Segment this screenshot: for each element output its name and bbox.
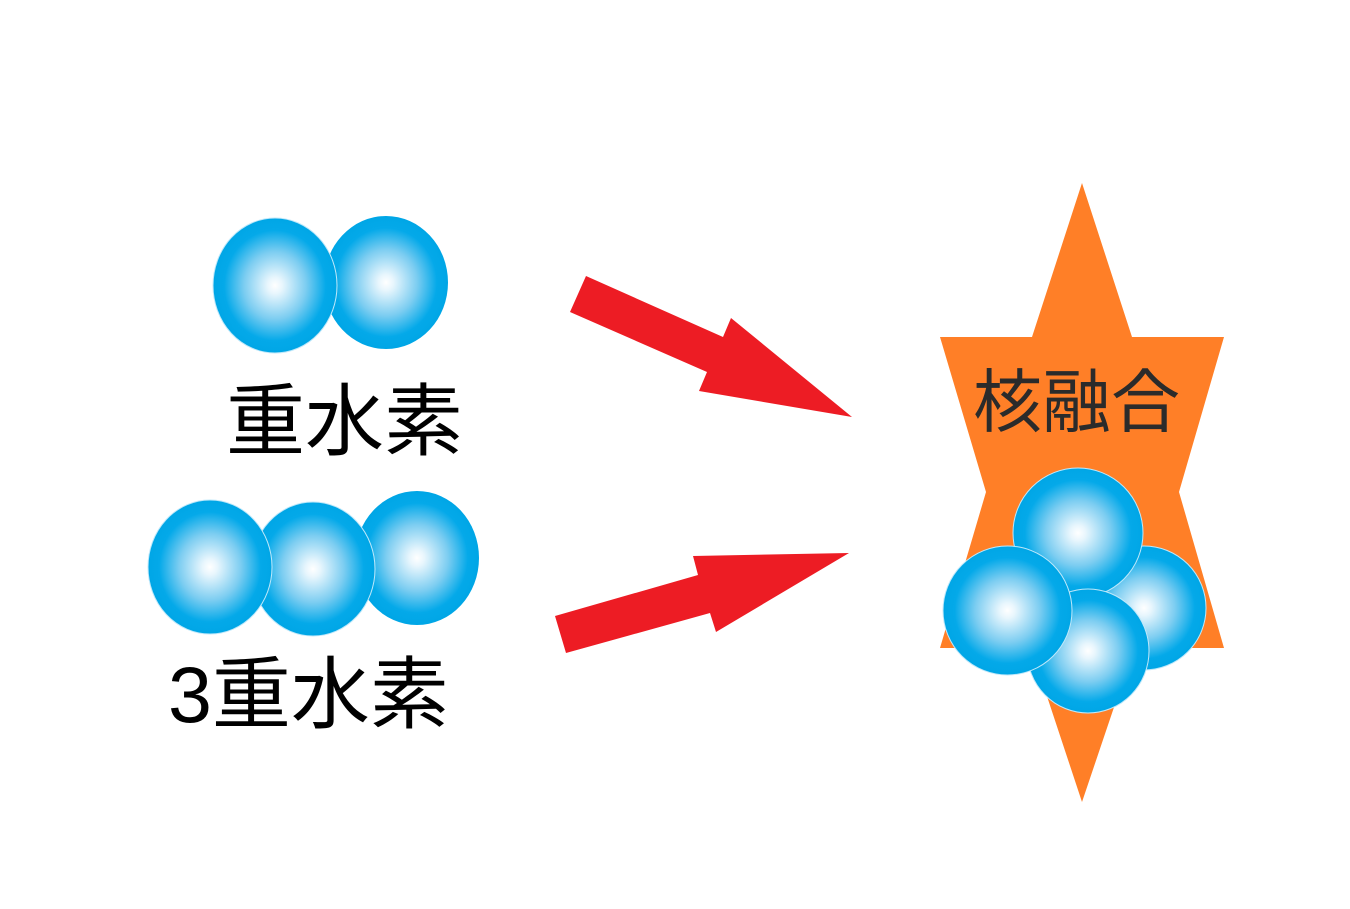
deuterium atom group [213, 216, 448, 353]
arrow: upper [570, 276, 852, 417]
label: tritium: 3重水素 [168, 650, 449, 739]
fusion star burst [940, 183, 1224, 802]
arrow: lower [555, 553, 849, 653]
label: fusion: 核融合 [973, 364, 1180, 441]
tritium atom group [148, 491, 479, 636]
label: deuterium: 重水素 [226, 377, 463, 466]
fused atom cluster [943, 468, 1206, 713]
